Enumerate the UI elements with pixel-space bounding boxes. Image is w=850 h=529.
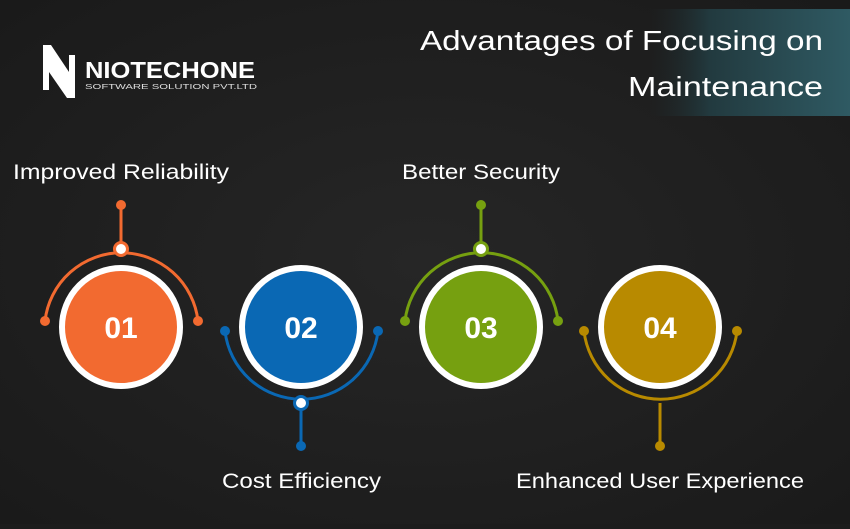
title panel [420, 9, 850, 116]
label: Cost Efficiency: Cost Efficiency [222, 470, 382, 493]
logo: SOFTWARE SOLUTION PVT.LTD [85, 82, 258, 91]
step 04: 04 [643, 312, 677, 345]
title panel: Advantages of Focusing on [420, 25, 823, 56]
step 01 [40, 200, 203, 386]
step 03: 03 [464, 312, 498, 345]
step 02: 02 [284, 312, 318, 345]
logo: NIOTECHONE [85, 57, 255, 83]
logo [43, 45, 258, 98]
label: Improved Reliability: Improved Reliability [13, 161, 230, 184]
icon: N logo [43, 45, 75, 98]
label: Better Security: Better Security [402, 161, 561, 184]
step 04 [579, 268, 742, 451]
title panel: Maintenance [628, 71, 823, 102]
step 02 [220, 268, 383, 451]
step 03 [400, 200, 563, 386]
label: Enhanced User Experience: Enhanced User Experience [516, 470, 804, 493]
step 01: 01 [104, 312, 138, 345]
